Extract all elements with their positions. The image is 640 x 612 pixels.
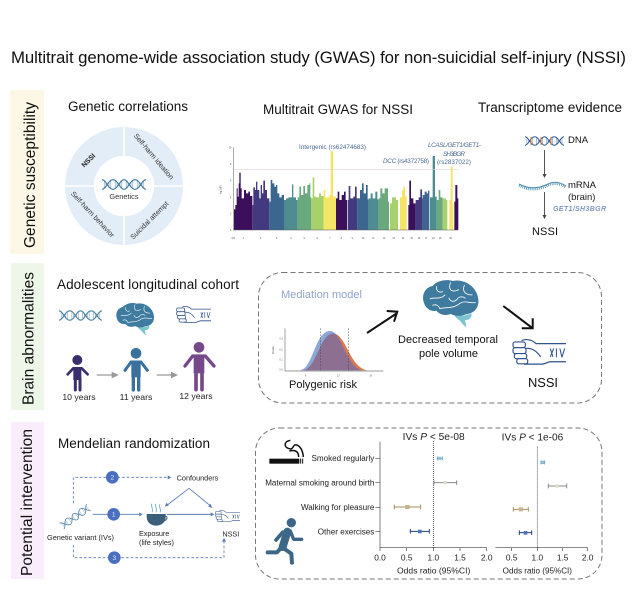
side label: genetic susceptibility <box>10 90 44 254</box>
section: brain abnormalities <box>11 263 602 410</box>
panel: forest plots <box>256 428 602 579</box>
Manhattan plot: 7 <box>329 238 331 240</box>
Manhattan plot: Intergenic (rs62474683) <box>299 144 366 151</box>
Manhattan plot: 12 <box>383 238 386 240</box>
heading: transcriptome evidence: Transcriptome evidence <box>478 100 622 115</box>
transcriptome flow: GET1/SH3BGR <box>553 206 606 213</box>
label: decreased temporal pole volume: Decreased temporal <box>398 334 498 346</box>
donut diagram: genetic correlations <box>64 126 184 246</box>
Manhattan plot <box>220 142 481 240</box>
heading: adolescent longitudinal cohort: Adolescent longitudinal cohort <box>57 277 239 292</box>
Manhattan plot: 6 <box>230 181 232 183</box>
Mendelian randomization diagram: NSSI <box>222 530 239 539</box>
transcriptome flow: (brain) <box>568 192 595 203</box>
Manhattan plot: 18 <box>432 238 435 240</box>
Manhattan plot: LCASL/GET1/GET1- <box>428 142 481 149</box>
Manhattan plot: SH3BGR <box>443 151 465 158</box>
forest plot: IVs P < 5e-08 <box>265 432 493 575</box>
Manhattan plot: 11 <box>372 238 375 240</box>
forest plot: IVs P < 1e-06: 2.0 <box>582 553 594 563</box>
density chart: polygenic risk: 0.2 <box>279 349 283 351</box>
Manhattan plot: 10 <box>362 238 365 240</box>
forest plot: IVs P < 5e-08: Other exercises <box>318 527 374 536</box>
forest plot: IVs P < 5e-08: Walking for pleasure <box>301 503 375 512</box>
Manhattan plot: 19 <box>439 238 442 240</box>
Mendelian randomization diagram: Confounders <box>177 474 219 483</box>
Mendelian randomization diagram: 3 <box>112 555 116 562</box>
forest plot: IVs P < 1e-06 <box>495 433 594 575</box>
forest plot: IVs P < 5e-08: 2.0 <box>481 553 493 563</box>
donut diagram: genetic correlations: Genetics <box>109 192 139 201</box>
panel: mediation model <box>258 272 602 403</box>
forest plot: IVs P < 1e-06: Odds ratio (95%CI) <box>503 566 572 575</box>
label: decreased temporal pole volume <box>398 334 498 360</box>
side label: potential intervention: Potential intervention <box>19 429 36 576</box>
Mendelian randomization diagram: Genetic variant (IVs) <box>47 533 114 542</box>
Manhattan plot: -log10(P) <box>220 185 222 195</box>
density chart: polygenic risk: 0.0 <box>279 370 283 372</box>
Manhattan plot: 1 <box>243 238 245 240</box>
density chart: polygenic risk: 12 <box>337 375 340 377</box>
forest plot: IVs P < 5e-08: 0.5 <box>401 553 413 563</box>
Manhattan plot: 10 <box>229 148 232 150</box>
density chart: polygenic risk: 0.1 <box>279 359 283 361</box>
Manhattan plot: 15 <box>410 238 414 240</box>
Manhattan plot: 8 <box>230 164 232 166</box>
Manhattan plot: 4 <box>230 197 232 199</box>
forest plot: IVs P < 5e-08: 0.0 <box>374 553 386 563</box>
Manhattan plot: (rs2837022) <box>437 159 471 166</box>
transcriptome flow <box>519 135 606 238</box>
side label: genetic susceptibility: Genetic susceptibility <box>22 102 39 248</box>
heading: multitrait GWAS: Multitrait GWAS for NSSI <box>263 102 413 117</box>
forest plot: IVs P < 5e-08: Smoked regularly <box>311 454 375 463</box>
arrow: risk to brain <box>367 311 397 333</box>
cohort timeline: children growing <box>62 342 214 402</box>
label: mediation model: Mediation model <box>281 289 362 301</box>
Mendelian randomization diagram: (life styles) <box>139 538 174 547</box>
Manhattan plot: 13 <box>392 238 396 240</box>
density chart: polygenic risk: Density <box>272 345 275 354</box>
Manhattan plot: 17 <box>425 238 428 240</box>
Manhattan plot: Chr <box>231 237 235 240</box>
Manhattan plot: 2 <box>230 214 232 216</box>
Mendelian randomization diagram: 1 <box>112 512 116 519</box>
cohort timeline: children growing: 11 years <box>120 392 153 402</box>
heading: mendelian randomization: Mendelian randomization <box>58 436 210 451</box>
density chart: polygenic risk: 0.3 <box>279 339 283 341</box>
forest plot: IVs P < 1e-06: IVs P < 1e-06 <box>502 433 564 444</box>
Manhattan plot: 5 <box>304 238 306 240</box>
forest plot: IVs P < 1e-06: 0.5 <box>506 553 518 563</box>
forest plot: IVs P < 1e-06: 1.0 <box>532 553 543 563</box>
side label: brain abnormalities: Brain abnormalities <box>20 272 38 405</box>
Manhattan plot: 20 <box>449 238 453 240</box>
icon: wrist with scars <box>513 340 566 364</box>
donut diagram: genetic correlations: Self-harm behavior <box>69 190 116 240</box>
donut diagram: genetic correlations: NSSI <box>81 153 97 169</box>
Manhattan plot: DCC (rs4372758) <box>383 158 429 165</box>
Manhattan plot: 2 <box>260 238 262 240</box>
side label: potential intervention <box>11 422 44 579</box>
forest plot: IVs P < 5e-08: 1.5 <box>454 553 466 563</box>
icon: cigarette <box>269 440 303 464</box>
forest plot: IVs P < 5e-08: Odds ratio (95%CI) <box>397 565 470 575</box>
cohort timeline: children growing: 10 years <box>62 392 96 402</box>
Mendelian randomization diagram <box>47 471 240 564</box>
forest plot: IVs P < 1e-06: 1.5 <box>557 553 569 563</box>
Mendelian randomization diagram: Exposure <box>139 529 169 538</box>
side label: brain abnormalities <box>11 263 44 410</box>
icon: brain <box>423 280 478 327</box>
Manhattan plot: 16 <box>418 238 421 240</box>
donut diagram: genetic correlations: Self-harm ideation <box>132 132 175 181</box>
cohort icons <box>59 303 211 335</box>
Manhattan plot: 14 <box>402 238 405 240</box>
transcriptome flow: mRNA <box>568 180 597 191</box>
transcriptome flow: DNA <box>568 135 589 146</box>
forest plot: IVs P < 5e-08: IVs P < 5e-08 <box>403 432 465 443</box>
Manhattan plot: 0 <box>230 230 232 232</box>
Manhattan plot: 3 <box>276 238 278 240</box>
forest plot: IVs P < 5e-08: 1.0 <box>428 553 439 563</box>
Mendelian randomization diagram: 2 <box>110 475 114 482</box>
forest plot: IVs P < 5e-08: Maternal smoking around birth <box>265 478 374 487</box>
density chart: polygenic risk: 16 <box>369 375 373 377</box>
main title: Multitrait genome-wide association study (GWAS) for non-suicidial self-injury (NSSI) <box>11 48 626 67</box>
density chart: polygenic risk <box>272 328 383 377</box>
label: polygenic risk: Polygenic risk <box>289 379 358 391</box>
Manhattan plot: 4 <box>290 238 292 240</box>
heading: genetic correlations: Genetic correlations <box>68 99 188 114</box>
label: decreased temporal pole volume: pole volume <box>419 348 478 360</box>
section: genetic susceptibility <box>10 90 622 254</box>
Manhattan plot: 8 <box>341 238 343 240</box>
transcriptome flow: NSSI <box>532 226 558 238</box>
cohort timeline: children growing: 12 years <box>179 391 213 401</box>
arrow: brain to NSSI <box>503 306 533 328</box>
section: potential intervention <box>11 422 602 579</box>
label: NSSI: NSSI <box>528 375 558 390</box>
donut diagram: genetic correlations: Suicidal attempt <box>129 200 170 241</box>
icon: runner <box>268 518 302 563</box>
Manhattan plot: 6 <box>317 238 319 240</box>
Manhattan plot: 9 <box>352 238 354 240</box>
density chart: polygenic risk: 8 <box>305 375 307 377</box>
